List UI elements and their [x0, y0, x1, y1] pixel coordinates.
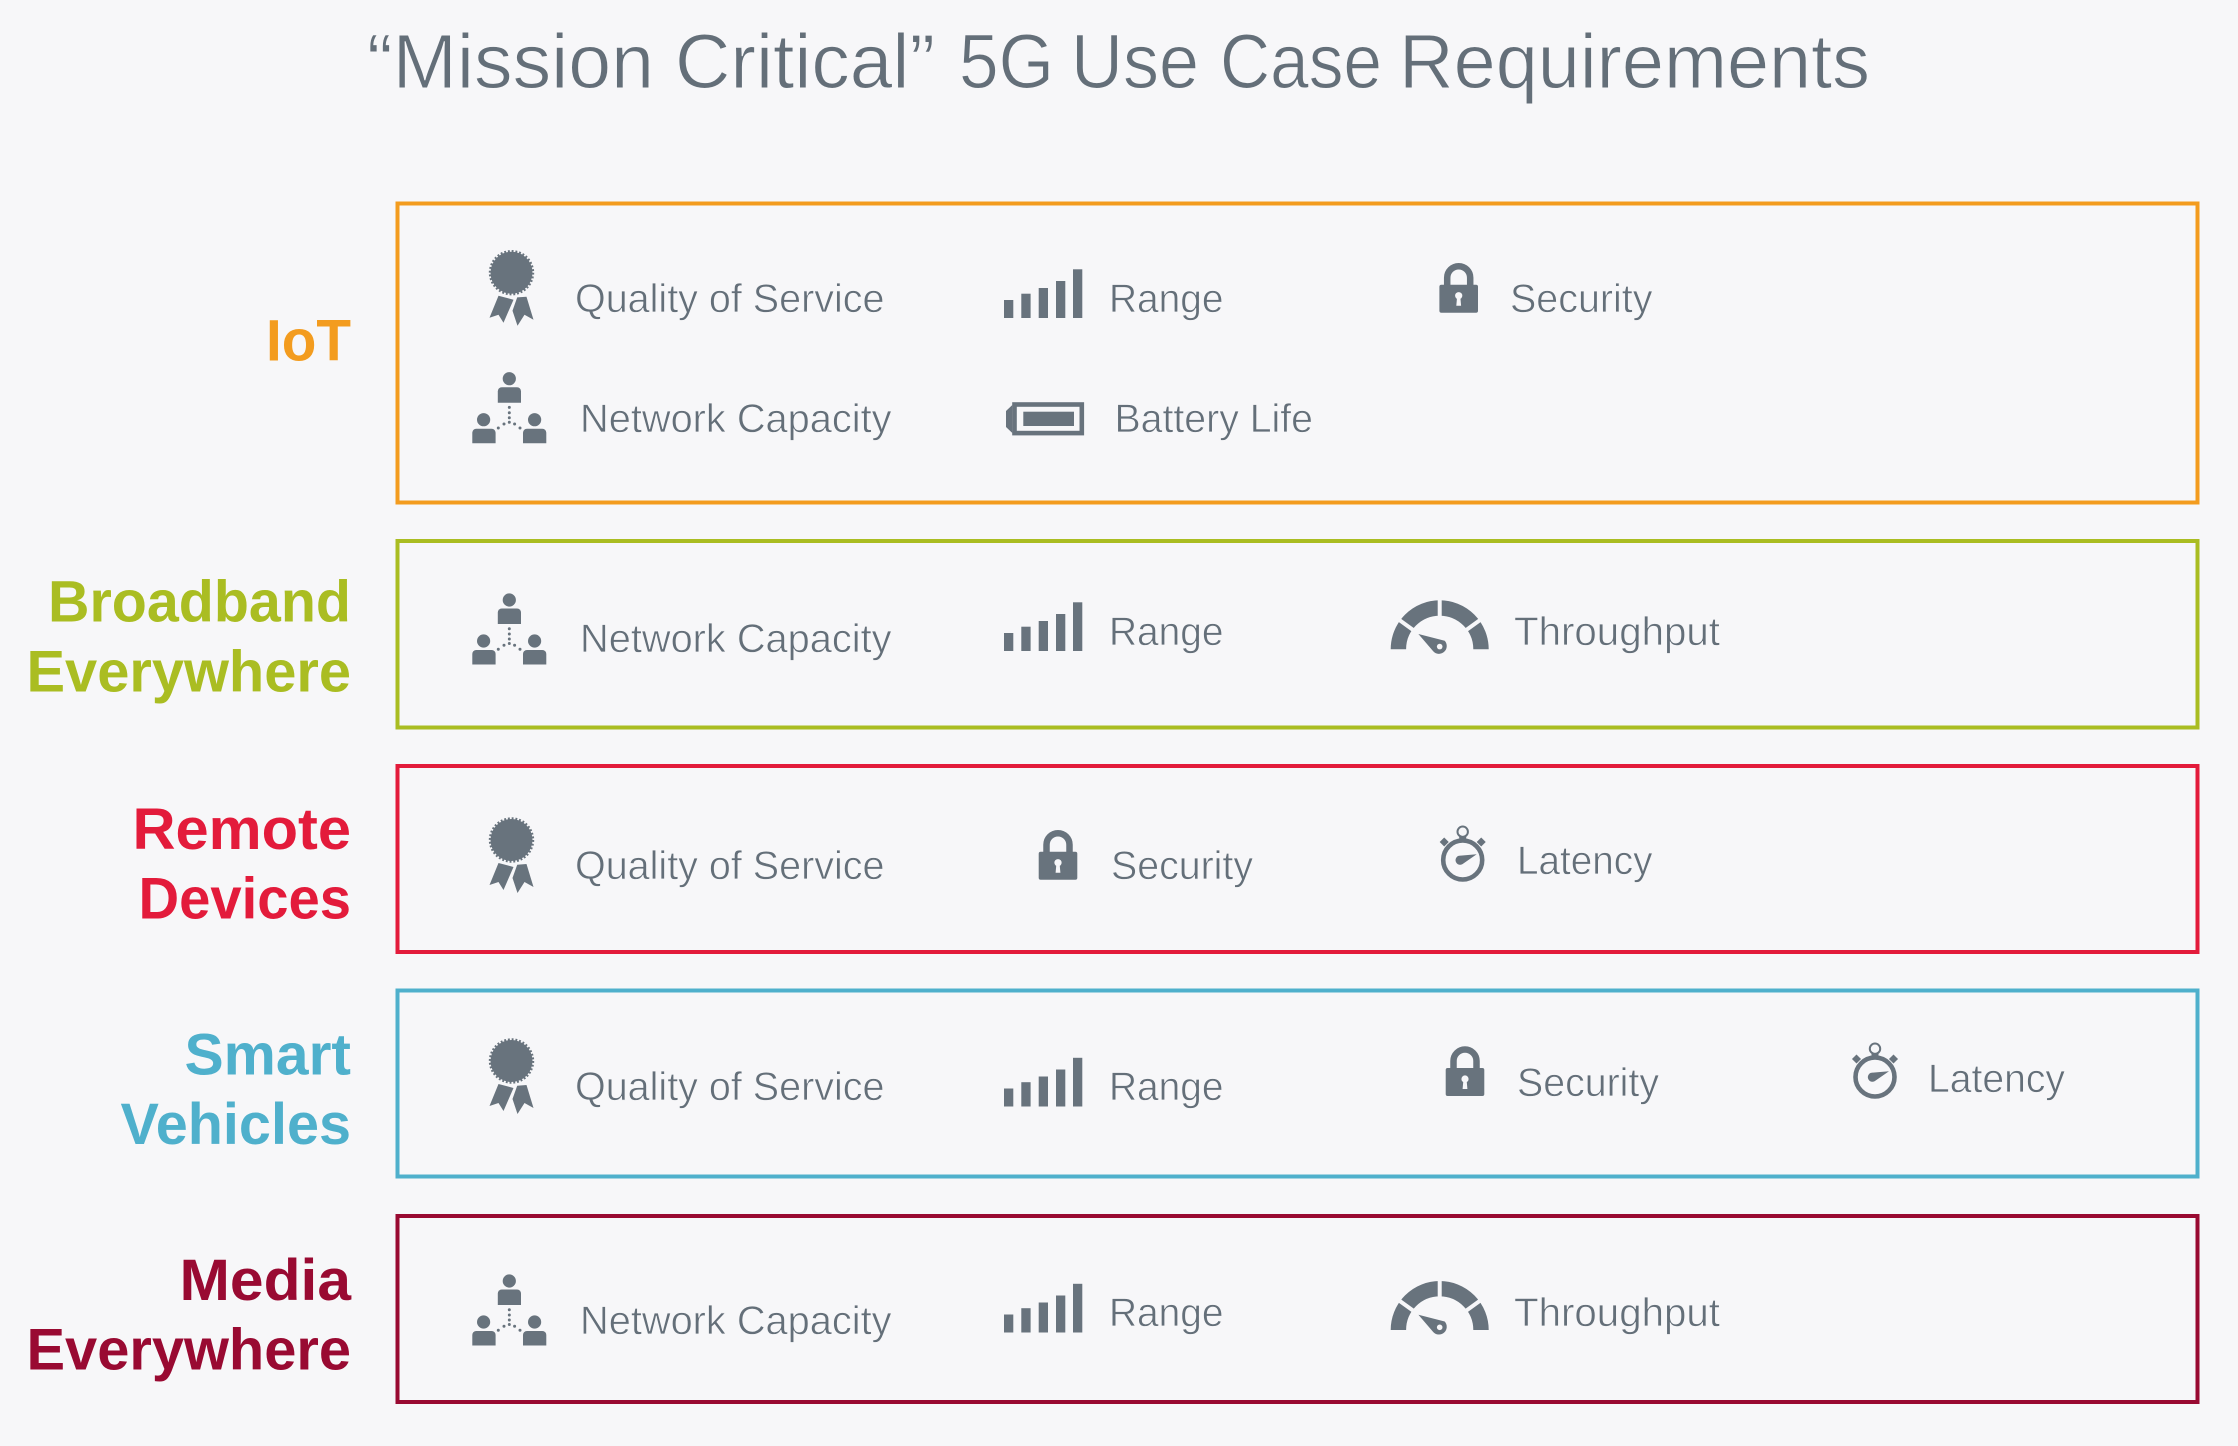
icon: quality of service [490, 1039, 534, 1114]
text: Quality of Service: Quality of Service [575, 844, 884, 888]
icon: quality of service [490, 251, 534, 326]
title: Use [1071, 19, 1199, 105]
text: Network Capacity: Network Capacity [580, 617, 892, 661]
icon: range [1004, 1284, 1082, 1332]
category label: Broadband Everywhere: Broadband [48, 570, 351, 634]
icon: battery life [1006, 404, 1082, 433]
icon: security [1439, 266, 1478, 313]
text: Network Capacity: Network Capacity [580, 1299, 892, 1343]
category label: Media Everywhere: Media [180, 1248, 352, 1313]
icon: latency [1852, 1044, 1898, 1096]
icon: latency [1440, 826, 1486, 880]
icon: security [1446, 1050, 1484, 1096]
text: Range: Range [1109, 1291, 1224, 1335]
category label: Media Everywhere: Everywhere [26, 1318, 351, 1382]
text: Security: Security [1510, 277, 1652, 321]
category label: Media Everywhere [26, 1248, 352, 1382]
text: Battery Life: Battery Life [1114, 397, 1313, 441]
panel: Broadband Everywhere requirements [398, 541, 2198, 728]
text: Throughput: Throughput [1514, 610, 1720, 654]
title: Requirements [1399, 19, 1870, 105]
text: Security: Security [1111, 844, 1253, 888]
category label: Smart Vehicles [120, 1022, 351, 1157]
text: Range: Range [1109, 277, 1224, 321]
title: “Mission [367, 19, 654, 105]
title [367, 19, 1870, 105]
category label: Smart Vehicles: Vehicles [120, 1092, 351, 1157]
text: Latency: Latency [1928, 1057, 2065, 1101]
title: Critical” [675, 19, 935, 105]
panel: Smart Vehicles requirements [398, 990, 2198, 1176]
category label: Remote Devices: Remote [132, 797, 351, 862]
row: Remote Devices [132, 766, 2198, 952]
icon: network capacity [472, 372, 546, 443]
panel: Remote Devices requirements [398, 766, 2198, 952]
text: Quality of Service: Quality of Service [575, 277, 884, 321]
icon: range [1004, 269, 1082, 318]
icon: quality of service [490, 818, 534, 893]
row: Smart Vehicles [120, 990, 2198, 1176]
icon: throughput [1397, 597, 1483, 654]
category label: IoT: IoT [266, 308, 351, 374]
category label: Remote Devices: Devices [138, 866, 351, 932]
row: Media Everywhere [26, 1216, 2198, 1402]
category label: Broadband Everywhere: Everywhere [26, 640, 351, 704]
text: Quality of Service: Quality of Service [575, 1065, 884, 1109]
category label: Broadband Everywhere [26, 570, 351, 704]
category label: Smart Vehicles: Smart [184, 1022, 351, 1088]
title: 5G [959, 19, 1054, 105]
icon: security [1039, 833, 1077, 880]
row: Broadband Everywhere [26, 541, 2198, 728]
row: IoT [266, 204, 2198, 502]
icon: network capacity [472, 1274, 546, 1346]
panel: IoT requirements [398, 204, 2198, 502]
text: Network Capacity: Network Capacity [580, 397, 892, 441]
icon: range [1004, 602, 1082, 651]
text: Security: Security [1517, 1061, 1659, 1105]
icon: range [1004, 1058, 1082, 1106]
title: Case [1220, 19, 1382, 105]
icon: network capacity [472, 593, 546, 664]
text: Range: Range [1109, 610, 1224, 654]
icon: throughput [1397, 1278, 1483, 1335]
text: Throughput: Throughput [1514, 1291, 1720, 1335]
category label: Remote Devices [132, 797, 351, 932]
panel: Media Everywhere requirements [398, 1216, 2198, 1402]
text: Range: Range [1109, 1065, 1224, 1109]
text: Latency: Latency [1517, 839, 1652, 883]
